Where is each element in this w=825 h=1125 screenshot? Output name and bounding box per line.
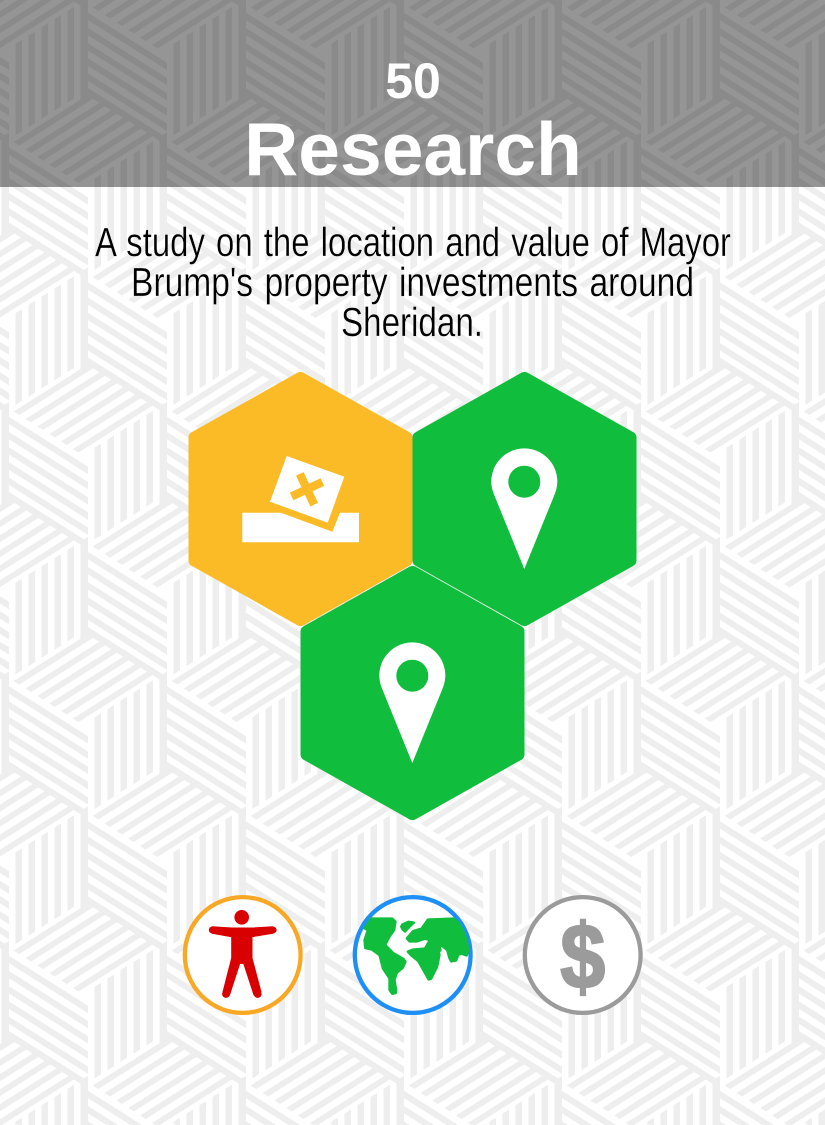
description text: Sheridan. bbox=[341, 299, 483, 345]
icon: location pin bbox=[491, 448, 557, 569]
icon: globe in blue circle bbox=[355, 897, 471, 1013]
card number: 50 bbox=[385, 53, 441, 109]
header banner bbox=[0, 0, 825, 191]
icon: dollar in grey circle bbox=[525, 897, 641, 1013]
hexagon: yellow ballot bbox=[194, 378, 406, 620]
description text: Brump's property investments around bbox=[131, 259, 694, 305]
icon: person in orange circle bbox=[185, 897, 301, 1013]
hexagon: green location pin right bbox=[418, 378, 630, 620]
icon: location pin bbox=[379, 642, 445, 763]
description text bbox=[95, 219, 731, 345]
title: Research bbox=[244, 107, 582, 191]
icon: dollar in grey circle: $ bbox=[560, 906, 605, 1008]
icon: ballot paper and box bbox=[242, 456, 359, 542]
hexagon: green location pin bottom bbox=[306, 572, 518, 814]
